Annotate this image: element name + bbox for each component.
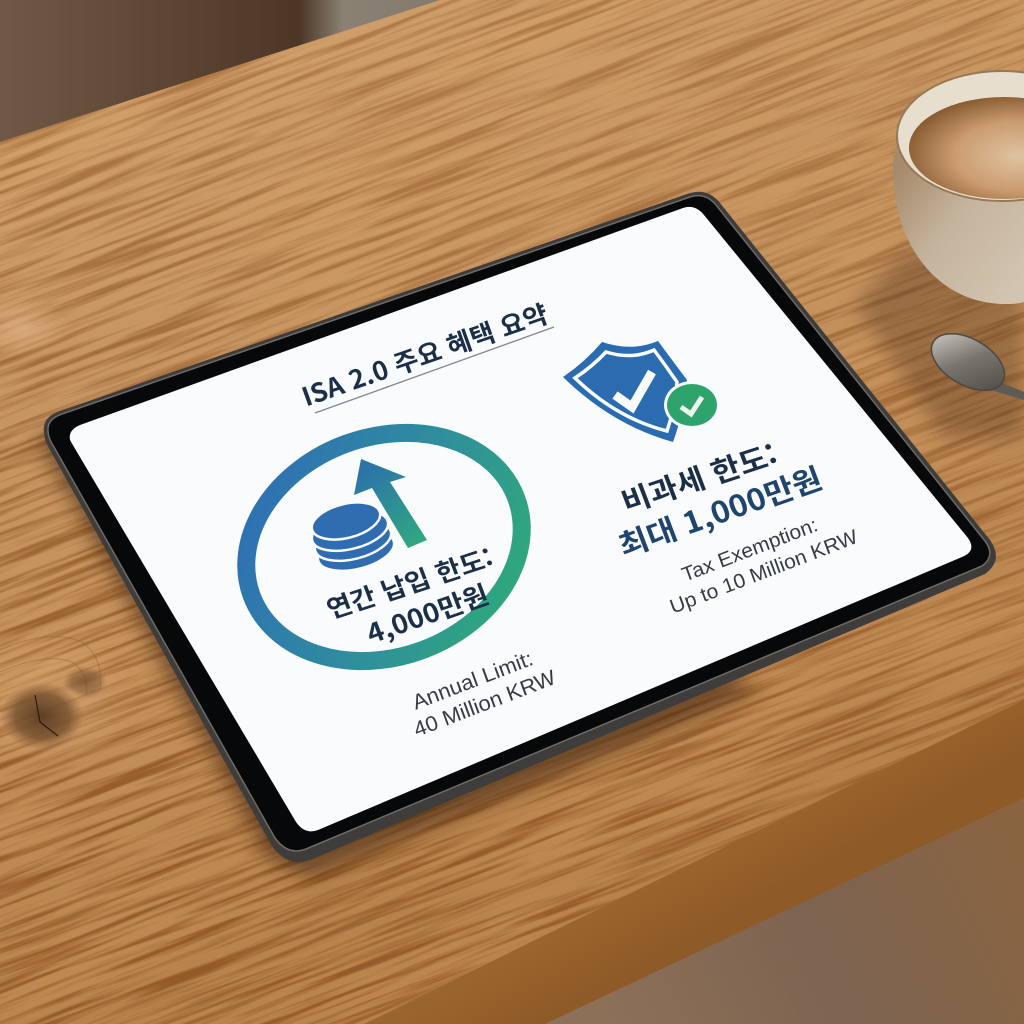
cup and coffee [893, 71, 1024, 304]
tax exemption value: 최대 1,000만원 [611, 455, 828, 565]
wood knot: dark lower-left [0, 636, 120, 752]
annual limit label: 연간 납입 한도: [321, 538, 498, 626]
tax exemption label: 비과세 한도: [614, 431, 783, 521]
tax exemption English: Tax Exemption: [679, 514, 821, 586]
icon: green check badge [664, 381, 720, 429]
cup rim [897, 71, 1024, 201]
tablet black bezel [48, 196, 990, 851]
tablet metal edge [44, 192, 996, 862]
background floor below table [360, 690, 1024, 1024]
background floor above table [0, 0, 1024, 150]
panel: annual limit [214, 395, 559, 742]
table side edge [364, 700, 1024, 1024]
icon: up arrow [354, 459, 427, 548]
coffee surface [909, 97, 1024, 199]
panel: annual limit: 40 Million KRW [410, 664, 559, 742]
icon: coin stack [308, 496, 398, 578]
wood knot: light upper-left [0, 306, 56, 352]
tablet cast shadow [38, 420, 760, 878]
icon: shield [563, 341, 687, 442]
annual limit English: Annual Limit: [409, 646, 536, 714]
progress ring [214, 395, 554, 699]
cup body [893, 100, 1024, 304]
panel: tax exemption [563, 341, 861, 618]
panel: tax exemption: Up to 10 Million KRW [667, 525, 861, 618]
cup cast shadow [855, 248, 1024, 440]
tablet [44, 192, 996, 862]
spoon [922, 322, 1024, 402]
heading: ISA 2.0 주요 혜택 요약 [296, 294, 553, 414]
annual limit value: 4,000만원 [360, 573, 494, 651]
tablet screen [70, 207, 971, 831]
